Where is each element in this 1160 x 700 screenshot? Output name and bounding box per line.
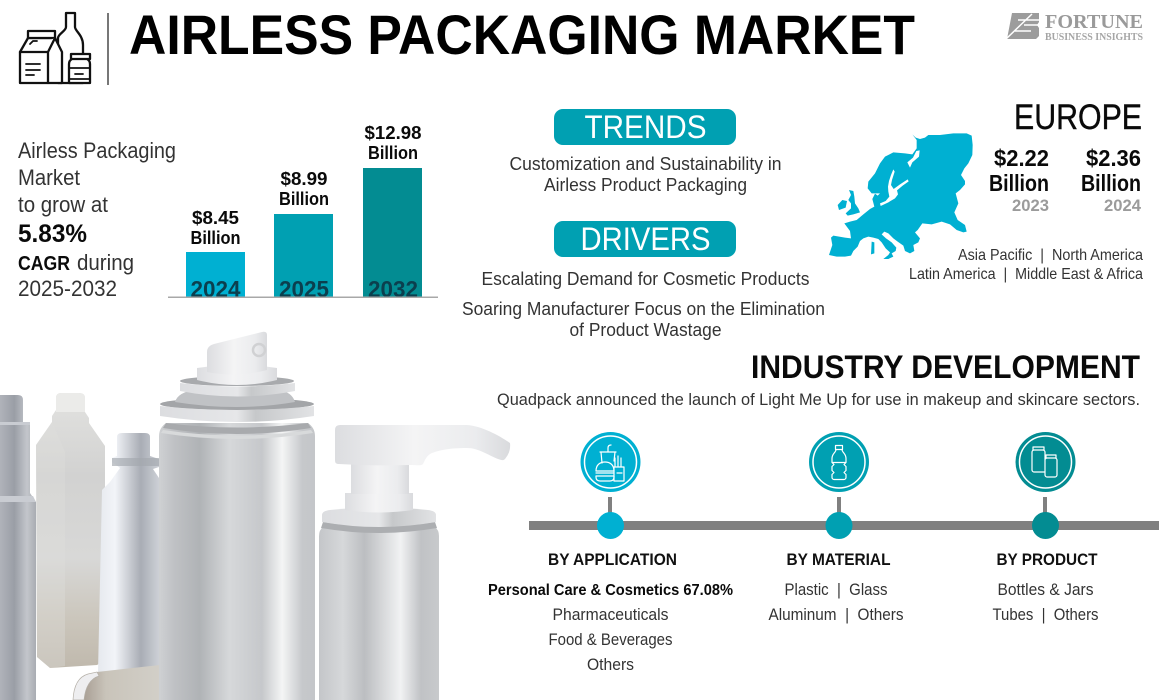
2024 value bbox=[1081, 145, 1142, 215]
header divider bbox=[107, 13, 109, 85]
other regions: Asia Pacific | North America bbox=[958, 247, 1143, 264]
bar 2032: $12.98 bbox=[364, 123, 422, 143]
icon: plastic bottle bbox=[809, 432, 869, 492]
bar chart: market size bbox=[186, 123, 422, 302]
small tube on the floor bbox=[73, 665, 160, 700]
2024 value: $2.36 bbox=[1086, 145, 1141, 171]
header icon: carton, bottle and jar bbox=[20, 13, 90, 83]
white tube bbox=[98, 433, 159, 680]
bar 2025 bbox=[274, 169, 333, 302]
cream hexagonal bottle bbox=[36, 393, 105, 668]
bar 2024: 2024 bbox=[190, 276, 241, 302]
drivers panel: Escalating Demand for Cosmetic Products bbox=[482, 269, 810, 289]
timeline bbox=[529, 432, 1159, 539]
CAGR text block: during bbox=[77, 250, 134, 275]
industry development panel bbox=[497, 349, 1140, 409]
bar 2024 bbox=[186, 208, 245, 302]
column: by application: Others bbox=[587, 656, 634, 674]
bar 2032: Billion bbox=[368, 143, 418, 163]
CAGR text block: 5.83% bbox=[18, 220, 87, 248]
drivers pill bbox=[554, 221, 736, 257]
drivers panel: Soaring Manufacturer Focus on the Elimination bbox=[462, 299, 825, 319]
trends panel: Airless Product Packaging bbox=[544, 175, 747, 195]
2024 value: 2024 bbox=[1104, 197, 1142, 215]
Baltic and Gulf of Bothnia cut bbox=[880, 169, 909, 206]
drivers panel: of Product Wastage bbox=[570, 320, 722, 340]
column: by material: BY MATERIAL bbox=[786, 550, 890, 569]
bar 2024: $8.45 bbox=[192, 208, 239, 228]
logo: Fortune Business Insights bbox=[1006, 11, 1143, 43]
2024 value: Billion bbox=[1081, 170, 1141, 196]
column: by material: Plastic | Glass bbox=[784, 581, 888, 599]
bar 2032 bbox=[363, 123, 422, 302]
logo: Fortune Business Insights: BUSINESS INSIGHTS bbox=[1045, 32, 1143, 43]
drivers panel: DRIVERS bbox=[580, 221, 710, 257]
column: by material: Aluminum | Others bbox=[768, 606, 904, 624]
column: by material bbox=[768, 550, 904, 624]
CAGR text block: Market bbox=[18, 165, 80, 190]
icon: food and cosmetics bbox=[580, 432, 640, 492]
column: by application bbox=[488, 550, 733, 674]
logo: Fortune Business Insights: FORTUNE bbox=[1045, 11, 1143, 33]
timeline bar bbox=[529, 521, 1159, 530]
CAGR text block: CAGR bbox=[18, 253, 70, 275]
trends panel: Customization and Sustainability in bbox=[510, 154, 782, 174]
stems bbox=[608, 497, 1047, 513]
trends panel bbox=[510, 109, 782, 195]
rear left bottle bbox=[0, 395, 36, 700]
bar 2032: 2032 bbox=[368, 276, 418, 302]
trends panel: TRENDS bbox=[584, 109, 706, 145]
column: by application: BY APPLICATION bbox=[548, 550, 677, 569]
chart axis bbox=[168, 296, 438, 298]
bar 2025: 2025 bbox=[279, 276, 329, 302]
CAGR text block: 2025-2032 bbox=[18, 276, 117, 301]
column: by application: Food & Beverages bbox=[548, 631, 672, 649]
product photo illustration bbox=[0, 332, 510, 700]
2023 value bbox=[989, 145, 1049, 215]
CAGR text block: Airless Packaging bbox=[18, 138, 176, 163]
White Sea cut bbox=[907, 150, 920, 168]
bar 2025: $8.99 bbox=[280, 169, 328, 189]
CAGR text block bbox=[18, 138, 176, 301]
column: by product: Bottles & Jars bbox=[998, 581, 1094, 599]
column: by product: BY PRODUCT bbox=[996, 550, 1098, 569]
CAGR text block: to grow at bbox=[18, 192, 108, 217]
column: by product: Tubes | Others bbox=[992, 606, 1098, 624]
column: by product bbox=[992, 550, 1098, 624]
trends pill bbox=[554, 109, 736, 145]
icon: bottles and jars bbox=[1016, 432, 1076, 492]
2023 value: $2.22 bbox=[994, 145, 1049, 171]
bar 2024: Billion bbox=[190, 228, 240, 248]
2023 value: 2023 bbox=[1012, 197, 1049, 215]
column: by application: Personal Care & Cosmetics 67.08% bbox=[488, 582, 733, 599]
title: AIRLESS PACKAGING MARKET bbox=[129, 3, 915, 66]
large aerosol can bbox=[159, 332, 315, 700]
pump bottle bbox=[319, 425, 510, 700]
bar 2025: Billion bbox=[279, 189, 329, 209]
Europe heading: EUROPE bbox=[1014, 98, 1142, 137]
drivers panel bbox=[462, 221, 825, 340]
other regions bbox=[909, 247, 1143, 283]
map of Europe bbox=[829, 133, 973, 259]
column: by application: Pharmaceuticals bbox=[552, 606, 668, 624]
Europe panel bbox=[829, 98, 1143, 283]
timeline dots bbox=[597, 512, 1059, 539]
industry development text: Quadpack announced the launch of Light Me Up for use in makeup and skincare sectors. bbox=[497, 390, 1140, 409]
2023 value: Billion bbox=[989, 170, 1049, 196]
industry development heading: INDUSTRY DEVELOPMENT bbox=[751, 349, 1140, 385]
